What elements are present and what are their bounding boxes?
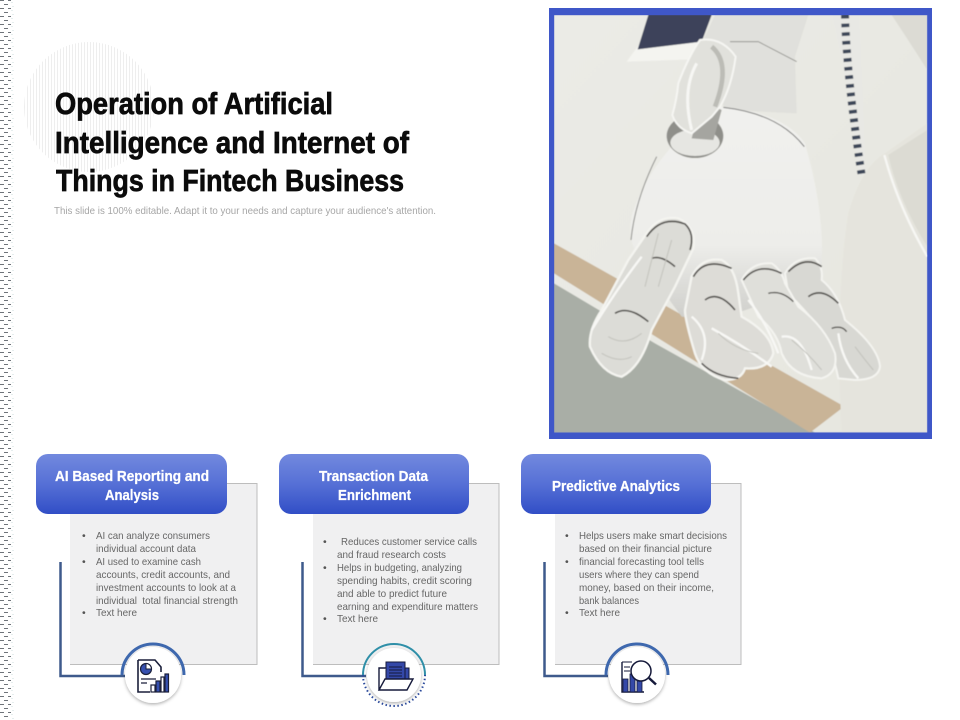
icon: report with pie and bars [122,644,184,703]
panel: predictive analytics [521,454,741,703]
body text 3: bank balances [579,595,639,607]
body text 3: users where they can spend [579,569,699,581]
title: Operation of Artificial [55,86,333,121]
body text 1: individual account data [96,543,196,555]
header 1: AI Based Reporting and [55,468,209,485]
body text 2: and able to predict future [337,588,447,600]
body text 2: Helps in budgeting, analyzing [337,562,462,574]
title: Things in Fintech Business [56,163,404,198]
body text 1: • [82,556,86,568]
connector line 3 [544,562,608,676]
striped decorative circle behind title [24,42,154,172]
left edge dashed strip [0,0,16,720]
header 3: Predictive Analytics [552,478,680,495]
body text 3: based on their financial picture [579,543,712,555]
header 2: Enrichment [338,487,411,504]
body text 2 [323,536,478,625]
body text 1: • [82,607,86,619]
body text 3: Helps users make smart decisions [579,530,727,542]
body text 1: accounts, credit accounts, and [96,569,230,581]
body text 3: money, based on their income, [579,582,714,594]
body text 3: • [565,607,569,619]
body text 1: AI used to examine cash [96,556,201,568]
body text 1 [82,530,238,619]
body text 2: • [323,613,327,625]
header 1 [36,454,227,514]
title: Intelligence and Internet of [55,125,410,160]
icon: chart with magnifier [606,644,668,703]
body text 1: Text here [96,607,137,619]
body text 2: earning and expenditure matters [337,601,478,613]
panel: AI based reporting [36,454,257,703]
body text 2: and fraud research costs [337,549,446,561]
body text 2: Reduces customer service calls [341,536,477,548]
connector line 2 [302,562,366,676]
body text 3: • [565,556,569,568]
header 2: Transaction Data [319,468,429,485]
header 2 [279,454,469,514]
panel: transaction data enrichment [279,454,499,706]
body text 2: Text here [337,613,378,625]
header 3 [521,454,711,514]
body text 1: individual total financial strength [96,595,238,607]
title [55,86,410,198]
body text 3 [565,530,727,619]
photo: robot hand with blue frame [549,8,932,439]
body text 3: Text here [579,607,620,619]
body text 1: AI can analyze consumers [96,530,210,542]
body text 3: • [565,530,569,542]
subtitle: This slide is 100% editable. Adapt it to your needs and capture your audience's attention. [54,205,436,217]
body text 1: investment accounts to look at a [96,582,236,594]
body text 3: financial forecasting tool tells [579,556,704,568]
body text 1: • [82,530,86,542]
body text 2: • [323,562,327,574]
body text 2: spending habits, credit scoring [337,575,472,587]
icon: folder with document [363,644,425,706]
connector line 1 [60,562,125,676]
header 1: Analysis [105,487,159,504]
body text 2: • [323,536,327,548]
